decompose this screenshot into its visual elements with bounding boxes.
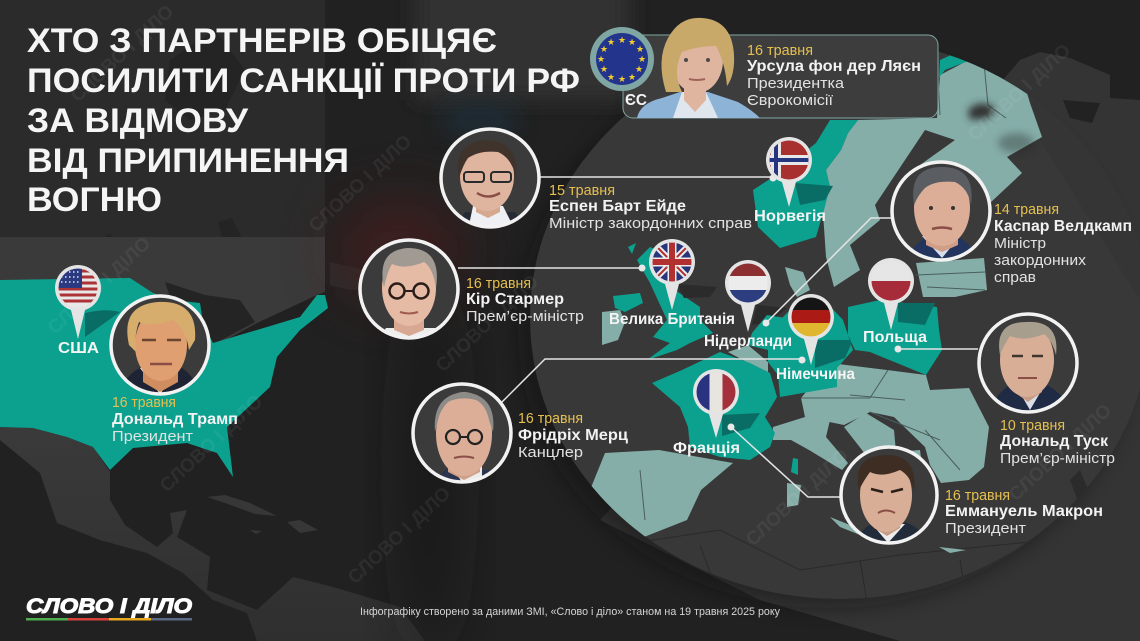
watermarks: СЛОВО І ДІЛО <box>742 445 853 551</box>
pin: Great Britain <box>649 239 695 310</box>
text: Donald Trump <box>112 395 238 445</box>
text: Donald Tusk: 10 травня <box>1000 418 1065 434</box>
text: Friedrich Merz: 16 травня <box>518 411 583 427</box>
country label: EU: ЄС <box>625 92 647 109</box>
France <box>652 352 777 460</box>
text: Donald Tusk: Прем’єр-міністр <box>1000 450 1115 467</box>
Norway <box>753 56 967 248</box>
icon: EU flag: ★ <box>628 37 636 47</box>
watermarks: СЛОВО І ДІЛО <box>344 483 455 589</box>
country labels: США <box>58 340 99 357</box>
watermarks: СЛОВО І ДІЛО <box>1005 400 1116 506</box>
icon: EU flag: ★ <box>600 64 608 74</box>
watermarks: СЛОВО І ДІЛО <box>156 391 267 497</box>
text: von der Leyen: Єврокомісії <box>747 92 834 109</box>
text: von der Leyen: Президентка <box>747 75 845 92</box>
watermarks: СЛОВО І ДІЛО <box>44 233 155 339</box>
title: ХТО З ПАРТНЕРІВ ОБІЦЯЄ <box>27 22 497 60</box>
text: von der Leyen <box>747 43 921 109</box>
portrait: Friedrich Merz <box>413 384 511 485</box>
country labels <box>58 208 927 457</box>
text: Espen Barth Eide: Еспен Барт Ейде <box>549 198 686 215</box>
text: Caspar Veldkamp: Міністр <box>994 235 1046 252</box>
pin: Norway <box>766 137 812 207</box>
text: Keir Starmer: Кір Стармер <box>466 291 564 308</box>
text: Emmanuel Macron: 16 травня <box>945 488 1010 504</box>
logo: СЛОВО І ДІЛО <box>26 595 192 618</box>
map lens with Europe <box>530 52 1094 610</box>
text: Donald Trump: Президент <box>112 428 193 445</box>
icon: EU flag: ★ <box>618 35 626 45</box>
Germany <box>768 308 853 397</box>
text: von der Leyen: Урсула фон дер Ляєн <box>747 58 921 75</box>
icon: EU flag: ★ <box>600 44 608 54</box>
connector lines <box>458 174 978 497</box>
pin: USA <box>55 265 101 339</box>
icon: EU flag: ★ <box>607 72 615 82</box>
icon: EU flag: ★ <box>635 64 643 74</box>
text: Keir Starmer: 16 травня <box>466 276 531 292</box>
Netherlands <box>748 315 785 350</box>
title: ВОГНЮ <box>27 181 162 219</box>
text: Espen Barth Eide: 15 травня <box>549 183 615 199</box>
text: Donald Trump: 16 травня <box>112 395 176 411</box>
pin: Poland <box>868 258 914 330</box>
text: Espen Barth Eide: Міністр закордонних справ <box>549 215 752 232</box>
pin: Netherlands <box>725 260 771 332</box>
text: Keir Starmer: Прем’єр-міністр <box>466 308 584 325</box>
text: Friedrich Merz <box>518 411 628 461</box>
text: Emmanuel Macron <box>945 488 1103 537</box>
text: Caspar Veldkamp: справ <box>994 269 1036 286</box>
country labels: Німеччина <box>776 366 855 383</box>
title: ЗА ВІДМОВУ <box>27 102 249 140</box>
icon: EU flag: ★ <box>636 44 644 54</box>
icon: EU flag <box>590 27 654 91</box>
title: ВІД ПРИПИНЕННЯ <box>27 142 349 180</box>
portrait: Keir Starmer <box>360 240 458 340</box>
text: Caspar Veldkamp: 14 травня <box>994 202 1059 218</box>
icon: EU flag: ★ <box>638 54 646 64</box>
text: Friedrich Merz: Канцлер <box>518 444 583 461</box>
country labels: Велика Британія <box>609 311 735 328</box>
portrait: von der Leyen <box>637 18 760 118</box>
text: Emmanuel Macron: Еммануель Макрон <box>945 503 1103 520</box>
Corsica <box>791 458 798 475</box>
panel: European Union <box>590 18 938 118</box>
country labels: Норвегія <box>754 208 826 225</box>
watermarks: СЛОВО І ДІЛО <box>432 271 543 377</box>
Great Britain and Northern Ireland <box>613 243 713 360</box>
text: Emmanuel Macron: Президент <box>945 520 1026 537</box>
country labels: Польща <box>863 329 927 346</box>
portrait: Espen Barth Eide <box>441 129 539 230</box>
text: Donald Tusk <box>1000 418 1115 467</box>
text: Caspar Veldkamp: закордонних <box>994 252 1087 269</box>
watermarks: СЛОВО І ДІЛО <box>67 1 178 107</box>
watermarks: СЛОВО І ДІЛО <box>964 40 1075 146</box>
icon: EU flag: ★ <box>628 72 636 82</box>
portrait: Donald Trump <box>111 296 209 395</box>
Poland <box>848 300 942 375</box>
country labels: Нідерланди <box>704 333 792 350</box>
text: Espen Barth Eide <box>549 183 752 232</box>
text: Friedrich Merz: Фрідріх Мерц <box>518 427 628 444</box>
text: Caspar Veldkamp: Каспар Велдкамп <box>994 218 1132 235</box>
portrait: Donald Tusk <box>979 314 1077 412</box>
title <box>27 22 580 219</box>
footer source note: Інфографіку створено за даними ЗМІ, «Слово і діло» станом на 19 травня 2025 року <box>360 606 780 618</box>
text: Caspar Veldkamp <box>994 202 1132 286</box>
USA shape <box>0 278 328 477</box>
country labels: Франція <box>673 440 740 457</box>
panel background <box>623 35 938 118</box>
text: Donald Trump: Дональд Трамп <box>112 411 238 428</box>
portrait: Caspar Veldkamp <box>892 162 990 262</box>
text: Donald Tusk: Дональд Туск <box>1000 433 1109 450</box>
portrait: Emmanuel Macron <box>841 447 937 545</box>
text: Keir Starmer <box>466 276 584 325</box>
title: ПОСИЛИТИ САНКЦІЇ ПРОТИ РФ <box>27 62 580 100</box>
pin: Germany <box>788 294 834 365</box>
text: von der Leyen: 16 травня <box>747 43 813 59</box>
icon: EU flag: ★ <box>607 37 615 47</box>
Sweden Finland and other non-pledging countries <box>590 52 1042 553</box>
pin: France <box>693 369 739 438</box>
icon: EU flag: ★ <box>618 74 626 84</box>
icon: EU flag: ★ <box>597 54 605 64</box>
watermarks: СЛОВО І ДІЛО <box>305 131 416 237</box>
